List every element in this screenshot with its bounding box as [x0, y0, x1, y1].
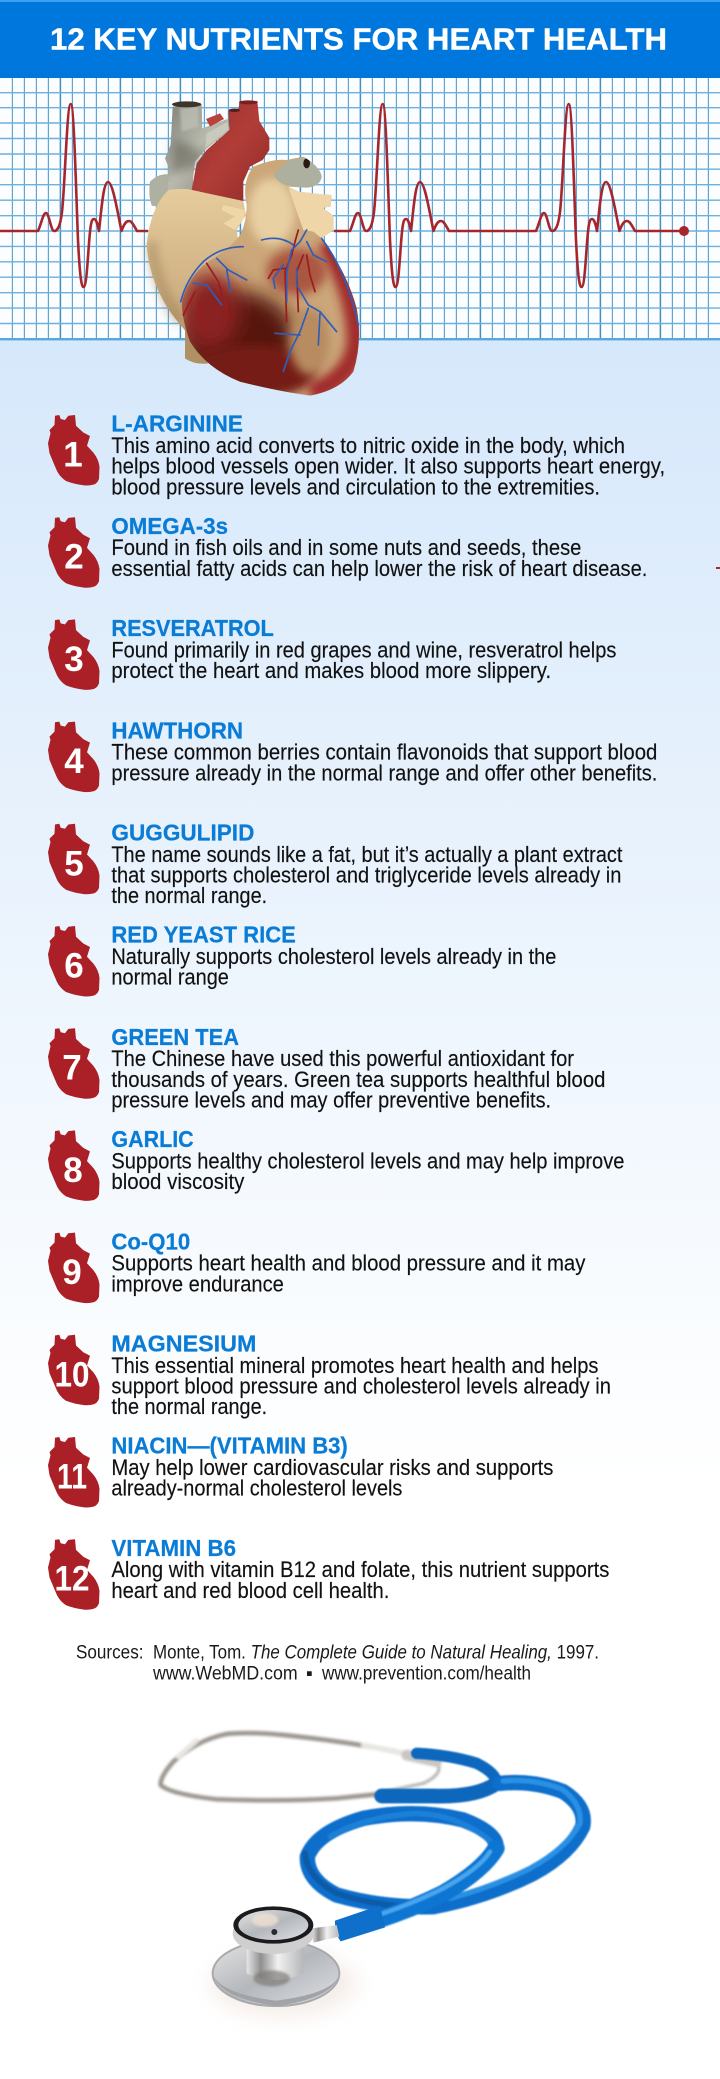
description: essential fatty acids can help lower the risk of heart disease.: [111, 556, 647, 581]
rubber tubing: [305, 1753, 583, 1928]
description: heart and red blood cell health.: [111, 1578, 389, 1603]
description: thousands of years. Green tea supports healthful blood: [111, 1067, 605, 1092]
icon: heart 4: 4: [64, 742, 84, 781]
icon: heart 4: [48, 722, 100, 792]
description: [111, 535, 647, 581]
description: May help lower cardiovascular risks and supports: [111, 1455, 553, 1480]
description: [111, 1557, 609, 1603]
description: Along with vitamin B12 and folate, this nutrient supports: [111, 1557, 609, 1582]
icon: heart 3: 3: [64, 640, 84, 679]
sources: www.prevention.com/health: [321, 1664, 531, 1684]
description: Supports heart health and blood pressure and it may: [111, 1251, 585, 1276]
description: support blood pressure and cholesterol levels already in: [111, 1374, 611, 1398]
nutrient 4: Hawthorn: [48, 717, 657, 792]
ECG trace: [0, 104, 689, 287]
page background gradient: [0, 340, 720, 1480]
nutrient 9: Co-Q10: [48, 1228, 585, 1303]
heading: L-ARGININE: [111, 411, 243, 437]
description: [111, 842, 622, 908]
nutrient 11: Niacin: [48, 1433, 553, 1508]
description: protect the heart and makes blood more slippery.: [111, 658, 551, 683]
heart veins: [181, 230, 358, 372]
icon: heart 6: [48, 926, 100, 996]
description: blood pressure levels and circulation to the extremities.: [111, 474, 600, 499]
nutrient 10: Magnesium: [48, 1330, 611, 1419]
title: 12 KEY NUTRIENTS FOR HEART HEALTH: [50, 22, 667, 56]
description: The name sounds like a fat, but it’s actually a plant extract: [111, 842, 622, 867]
stem: [247, 1937, 303, 1980]
heading: Co-Q10: [111, 1228, 190, 1254]
icon: heart 5: 5: [64, 844, 84, 883]
binaural metal tubes: [161, 1733, 439, 1800]
description: [111, 637, 616, 683]
diaphragm disc: [213, 1941, 339, 2006]
icon: heart 2: 2: [64, 538, 84, 577]
icon: heart 10: 10: [54, 1355, 90, 1394]
sources: ▪: [306, 1664, 313, 1684]
description: [111, 1455, 553, 1501]
heading: RED YEAST RICE: [111, 922, 296, 948]
nutrient 5: Guggulipid: [48, 820, 622, 908]
description: [111, 740, 657, 785]
stethoscope photo illustration: [161, 1733, 583, 2017]
heading: GREEN TEA: [111, 1024, 239, 1050]
anatomical heart illustration: [147, 100, 373, 402]
nutrient 3: Resveratrol: [48, 615, 616, 690]
description: Naturally supports cholesterol levels already in the: [111, 944, 556, 969]
icon: heart 1: [48, 415, 100, 486]
heading: VITAMIN B6: [111, 1535, 236, 1561]
description: pressure already in the normal range and offer other benefits.: [111, 760, 657, 785]
icon: heart 7: [48, 1028, 100, 1099]
soft shadow: [210, 1950, 357, 2017]
icon: heart 5: [48, 824, 100, 894]
icon: heart 11: 11: [57, 1458, 87, 1496]
sources: [76, 1643, 599, 1684]
description: [111, 1046, 605, 1113]
icon: heart 6: 6: [64, 946, 84, 986]
description: the normal range.: [111, 1394, 267, 1419]
stray trace mark at right edge: [716, 567, 720, 569]
description: [111, 1148, 624, 1194]
description: [111, 1251, 585, 1296]
description: that supports cholesterol and triglyceride levels already in: [111, 862, 621, 888]
description: [111, 433, 665, 499]
heading: OMEGA-3s: [111, 513, 228, 539]
nutrient 1: L-Arginine: [48, 411, 665, 499]
description: Found primarily in red grapes and wine, resveratrol helps: [111, 637, 616, 662]
heading: NIACIN—(VITAMIN B3): [111, 1433, 348, 1459]
bell: [233, 1913, 314, 1954]
nutrient 12: Vitamin B6: [48, 1535, 609, 1610]
icon: heart 9: [48, 1233, 100, 1303]
description: normal range: [111, 965, 229, 990]
description: Supports healthy cholesterol levels and may help improve: [111, 1148, 624, 1173]
ventricle: [182, 156, 359, 396]
description: pressure levels and may offer preventive benefits.: [111, 1088, 551, 1113]
heading: GARLIC: [111, 1126, 194, 1152]
description: [111, 944, 556, 990]
nutrient 2: Omega-3s: [48, 513, 647, 588]
icon: heart 9: 9: [62, 1253, 82, 1292]
sources: www.WebMD.com: [152, 1664, 298, 1684]
description: helps blood vessels open wider. It also supports heart energy,: [111, 454, 665, 479]
heading: MAGNESIUM: [111, 1330, 256, 1356]
description: The Chinese have used this powerful antioxidant for: [111, 1046, 574, 1071]
heading: RESVERATROL: [111, 615, 274, 641]
chest piece stem connector: [312, 1925, 339, 1943]
icon: heart 11: [48, 1437, 100, 1508]
title banner: [0, 0, 720, 78]
icon: heart 8: 8: [63, 1151, 83, 1190]
description: [111, 1353, 611, 1419]
icon: heart 3: [48, 619, 100, 690]
description: the normal range.: [111, 883, 267, 908]
icon: heart 8: [48, 1130, 100, 1201]
nutrient 7: Green Tea: [48, 1024, 605, 1113]
icon: heart 10: [48, 1335, 100, 1405]
icon: heart 12: 12: [54, 1560, 90, 1599]
nutrient 6: Red Yeast Rice: [48, 922, 556, 996]
sources: Monte, Tom. The Complete Guide to Natural Healing, 1997.: [153, 1643, 599, 1664]
description: This essential mineral promotes heart health and helps: [111, 1353, 598, 1378]
icon: heart 12: [48, 1539, 100, 1610]
nutrient 8: Garlic: [48, 1126, 624, 1201]
description: This amino acid converts to nitric oxide in the body, which: [111, 433, 625, 458]
icon: heart 7: 7: [62, 1049, 82, 1088]
description: already-normal cholesterol levels: [111, 1476, 402, 1501]
description: blood viscosity: [111, 1169, 244, 1194]
tubing sleeve: [335, 1905, 385, 1941]
sources: Sources:: [76, 1643, 144, 1664]
icon: heart 2: [48, 517, 100, 588]
icon: heart 1: 1: [63, 436, 83, 474]
description: These common berries contain flavonoids that support blood: [111, 740, 657, 765]
ECG grid: [0, 78, 720, 340]
description: improve endurance: [111, 1271, 284, 1296]
heading: HAWTHORN: [111, 717, 243, 743]
heading: GUGGULIPID: [111, 820, 254, 846]
description: Found in fish oils and in some nuts and seeds, these: [111, 535, 581, 560]
